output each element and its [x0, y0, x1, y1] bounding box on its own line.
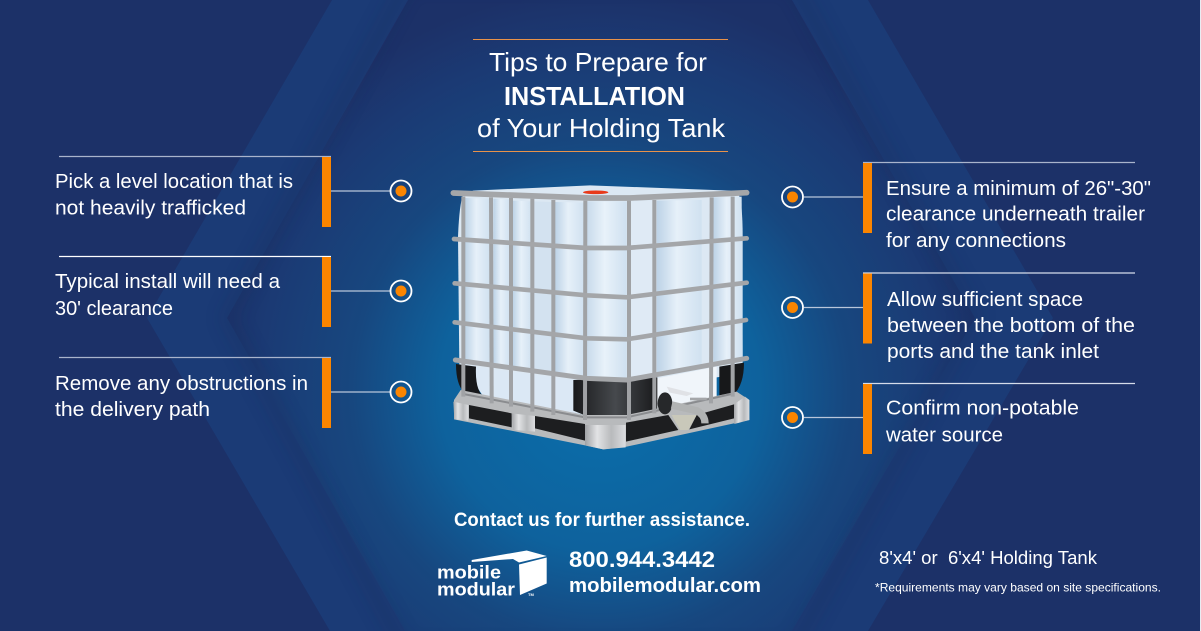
logo: Mobile Modular: TM — [528, 592, 534, 597]
pallet — [453, 390, 749, 449]
tip: level location: not heavily trafficked — [55, 198, 246, 220]
title — [473, 40, 728, 152]
tip: minimum clearance underneath trailer — [782, 162, 1151, 252]
tip: level location — [55, 156, 412, 227]
tip: non-potable water source — [782, 384, 1135, 454]
website: mobilemodular.com — [569, 575, 761, 597]
disclaimer: *Requirements may vary based on site specifications. — [875, 580, 1161, 594]
logo: Mobile Modular — [437, 550, 547, 599]
logo: Mobile Modular: mobile — [437, 562, 501, 582]
illustration: IBC holding tank — [453, 185, 749, 449]
black lower tank sections — [456, 363, 744, 416]
title: INSTALLATION — [504, 83, 685, 111]
tip: 30 foot clearance: 30' clearance — [55, 298, 173, 320]
tip: minimum clearance underneath trailer: clearance underneath trailer — [886, 204, 1145, 226]
red cap — [583, 190, 608, 194]
phone number: 800.944.3442 — [569, 547, 715, 572]
tip: remove obstructions — [55, 358, 412, 428]
tip: space between ports and tank inlet: between the bottom of the — [887, 315, 1135, 337]
tip: space between ports and tank inlet — [782, 273, 1135, 363]
tip: minimum clearance underneath trailer: Ensure a minimum of 26"-30" — [886, 178, 1151, 200]
drain valve — [658, 387, 707, 423]
tip: space between ports and tank inlet: ports and the tank inlet — [887, 341, 1099, 363]
cage vertical bars — [463, 197, 733, 420]
tip: level location: Pick a level location that is — [55, 171, 293, 193]
title: of Your Holding Tank — [477, 113, 726, 143]
tip: remove obstructions: the delivery path — [55, 399, 210, 421]
tip: non-potable water source: water source — [885, 424, 1003, 446]
tip: minimum clearance underneath trailer: for any connections — [886, 230, 1066, 252]
tip: non-potable water source: Confirm non-potable — [886, 398, 1079, 420]
tank body — [458, 185, 743, 415]
tip: 30 foot clearance: Typical install will need a — [55, 271, 281, 293]
tip: remove obstructions: Remove any obstructions in — [55, 373, 308, 395]
tip: space between ports and tank inlet: Allow sufficient space — [887, 289, 1083, 311]
logo: Mobile Modular: modular — [437, 579, 515, 599]
title: Tips to Prepare for — [489, 47, 707, 77]
cage horizontal rails — [453, 193, 747, 380]
tank size note: 8'x4' or 6'x4' Holding Tank — [879, 548, 1098, 568]
contact heading: Contact us for further assistance. — [454, 510, 750, 531]
tip: 30 foot clearance — [55, 256, 412, 327]
